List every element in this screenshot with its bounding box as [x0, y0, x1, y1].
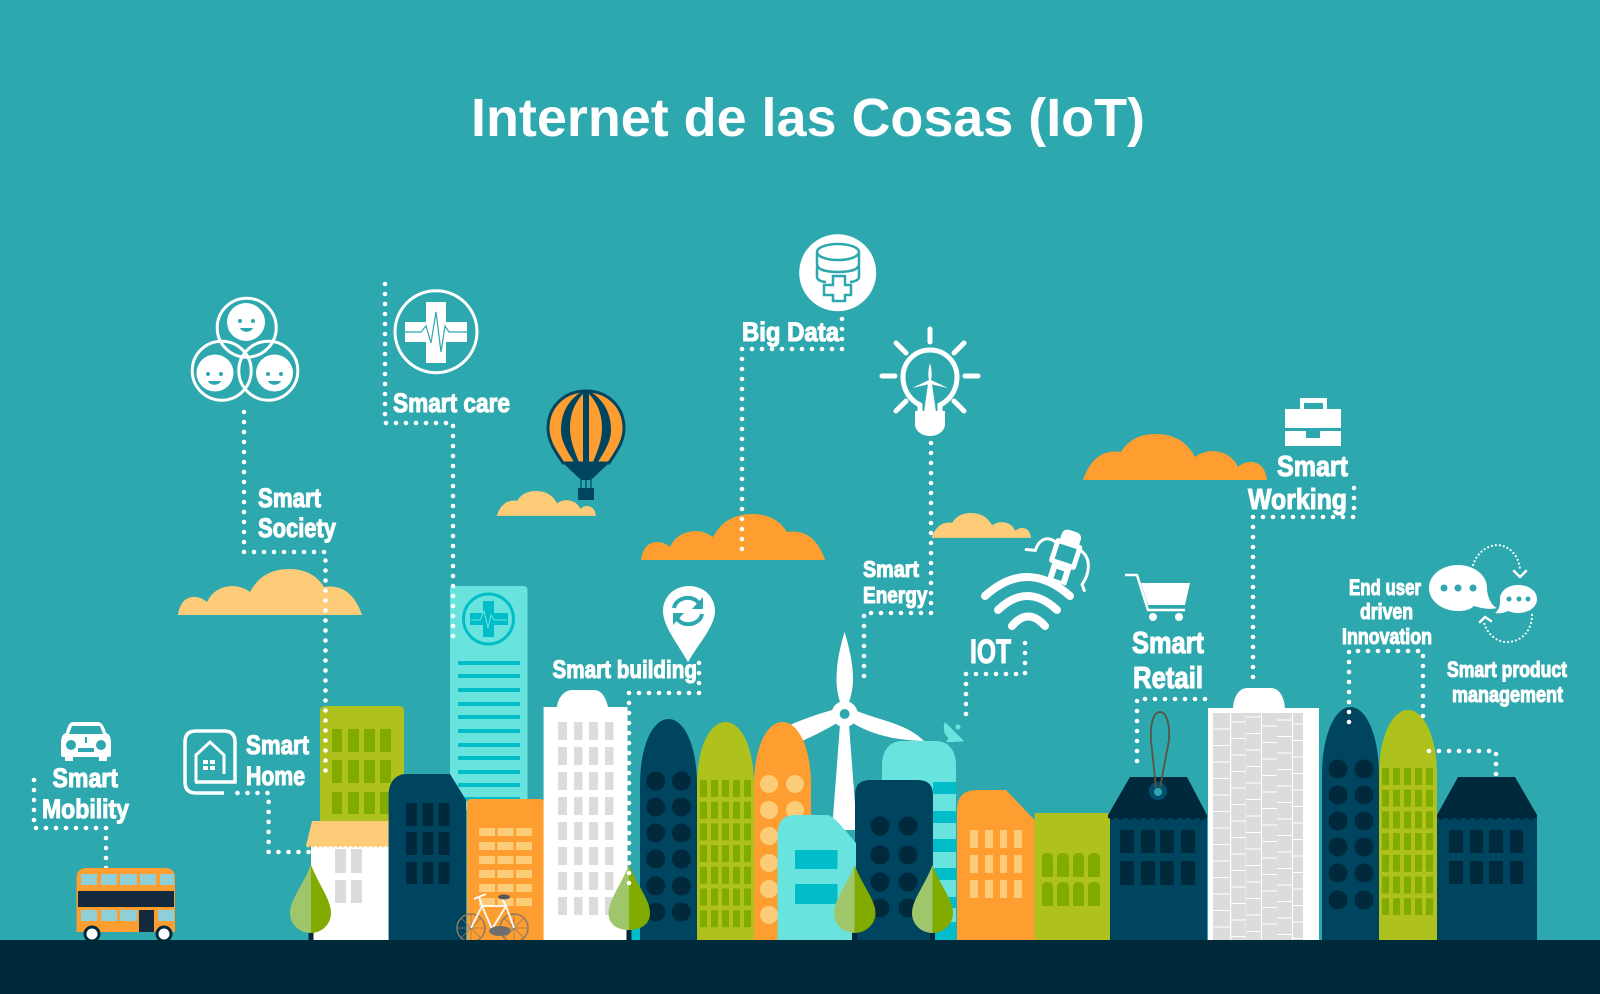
label: smart retail [1132, 625, 1204, 695]
cloud: centre orange [641, 514, 825, 560]
icon: big data database [799, 234, 876, 311]
cloud: balloon peach [497, 491, 596, 516]
double-decker bus [76, 868, 175, 942]
tree 4 [912, 865, 953, 940]
cloud: bulb peach [932, 513, 1031, 538]
icon: smart working briefcase [1285, 398, 1341, 446]
label: end user driven innovation: driven [1360, 599, 1413, 624]
icon: smart energy light bulb [882, 329, 978, 436]
connector: smart energy [864, 443, 931, 685]
label: smart energy: Energy [863, 582, 928, 608]
tree 3 [834, 865, 876, 940]
label: smart mobility: Mobility [42, 794, 129, 824]
icon: smart home [185, 731, 235, 793]
label: smart home: Smart [246, 730, 309, 760]
connector: smart working [1253, 488, 1354, 687]
label: smart building: Smart building [552, 656, 697, 684]
label: smart mobility [42, 763, 129, 824]
icon: satellite dish [944, 722, 964, 742]
ground [0, 940, 1600, 994]
building: orange chamfered [957, 790, 1035, 940]
connector: smart building [629, 663, 699, 885]
building: navy house with price tag [1108, 712, 1207, 940]
wind turbine [790, 632, 924, 830]
connector: big data [742, 319, 842, 551]
label: iot: IOT [970, 633, 1011, 671]
label: smart working: Working [1248, 484, 1347, 516]
label: smart mobility: Smart [52, 763, 118, 793]
label: end user driven innovation: Innovation [1342, 624, 1432, 649]
cloud: upper right orange [1083, 434, 1267, 480]
label: smart working [1248, 451, 1348, 516]
building: lime capsule right [1379, 710, 1437, 940]
building: navy capsule [627, 719, 697, 940]
label: smart product management: management [1452, 682, 1564, 707]
building: light cyan striped [882, 741, 956, 940]
building: hospital tower [450, 586, 528, 810]
label: smart home [246, 730, 309, 791]
label: smart working: Smart [1277, 451, 1348, 483]
tree 1 [290, 865, 331, 940]
label: smart home: Home [246, 761, 305, 791]
building: navy capsule right [1322, 707, 1379, 940]
label: smart care: Smart care [393, 388, 510, 418]
tree 2 [608, 865, 650, 940]
label: smart retail: Smart [1132, 625, 1204, 660]
building: lime low with arches [1035, 813, 1111, 940]
building: lime capsule [697, 722, 754, 940]
label: smart energy [863, 556, 928, 608]
label: end user driven innovation: End user [1349, 575, 1421, 600]
label: big data: Big Data [742, 317, 840, 347]
cloud: left peach [178, 569, 362, 615]
hot air balloon [548, 391, 624, 500]
building: navy rounded [855, 780, 933, 940]
building: front light cyan [778, 815, 856, 940]
icon: smart society people [192, 298, 298, 400]
connector: smart home [238, 793, 310, 852]
building: orange block [467, 799, 544, 940]
connector: smart retail [1137, 699, 1205, 771]
building: white brick tower [1208, 688, 1319, 940]
icon: smart mobility car [61, 722, 111, 761]
icon: smart retail cart [1125, 575, 1190, 621]
building: white tower with dome [544, 690, 628, 940]
connector: smart mobility [34, 780, 106, 872]
icon: iot wifi and robot [985, 519, 1101, 626]
connector: iot [966, 643, 1025, 715]
icon: smart care cross [395, 291, 477, 373]
building: navy house right [1437, 777, 1537, 940]
label: smart product management [1447, 657, 1568, 707]
building: orange capsule [754, 722, 811, 940]
icon: smart building map pin [663, 586, 715, 662]
connector: smart society [244, 412, 326, 775]
label: smart society: Smart [258, 483, 321, 513]
connector: smart product management [1429, 751, 1496, 783]
title: Internet de las Cosas (IoT) [471, 88, 1145, 148]
building: shop with awning [306, 821, 390, 940]
building: lime block [320, 706, 404, 830]
label: smart society [258, 483, 336, 543]
icon: chat bubbles with cycle arrows [1429, 545, 1537, 642]
icon: bicycle [457, 894, 528, 942]
label: end user driven innovation [1342, 575, 1432, 649]
label: smart energy: Smart [863, 556, 919, 582]
connector: smart care [385, 284, 453, 645]
label: smart product management: Smart product [1447, 657, 1568, 682]
robot [1019, 519, 1101, 591]
label: smart society: Society [258, 513, 336, 543]
label: smart retail: Retail [1133, 660, 1203, 695]
building: navy chamfered [389, 774, 466, 940]
connector: end user driven innovation [1349, 651, 1423, 722]
